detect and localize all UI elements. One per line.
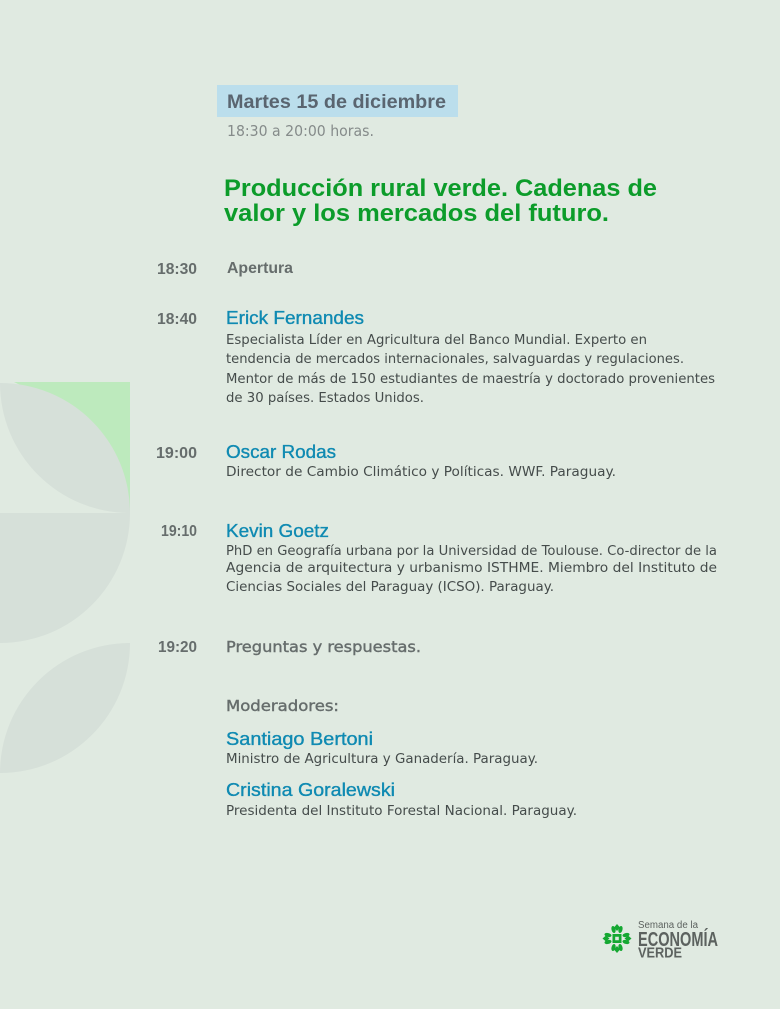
item: Kevin Goetz <box>161 521 717 595</box>
item: Erick Fernandes: 18:40 <box>157 311 197 328</box>
item: opening: 18:30 <box>157 261 197 278</box>
item: Oscar Rodas: 19:00 <box>156 445 197 462</box>
logo <box>602 920 718 962</box>
logo wordmark: VERDE <box>638 944 682 962</box>
session title: Producción rural verde. Cadenas de <box>224 175 657 202</box>
moderator: Cristina Goralewski: Cristina Goralewski <box>226 780 395 800</box>
item: Kevin Goetz: 19:10 <box>161 523 197 540</box>
item: Kevin Goetz: PhD en Geografía urbana por la Universidad de Toulouse. Co-director de la <box>226 543 717 559</box>
top leaf <box>0 383 130 513</box>
item: Erick Fernandes: de 30 países. Estados Unidos. <box>226 390 424 406</box>
moderator: Cristina Goralewski: Presidenta del Instituto Forestal Nacional. Paraguay. <box>226 804 577 819</box>
item: questions: 19:20 <box>158 639 197 656</box>
session title <box>224 175 657 227</box>
item: questions <box>158 638 421 656</box>
logo wordmark: ECONOMÍA <box>638 928 718 951</box>
schedule hours: 18:30 a 20:00 horas. <box>227 122 374 140</box>
item: Erick Fernandes: Especialista Líder en Agricultura del Banco Mundial. Experto en <box>226 332 647 348</box>
decorative leaves <box>0 382 130 773</box>
moderator: Santiago Bertoni: Ministro de Agricultura y Ganadería. Paraguay. <box>226 751 538 767</box>
item: Oscar Rodas: Director de Cambio Climático y Políticas. WWF. Paraguay. <box>226 464 616 480</box>
logo wordmark: Semana de la <box>638 920 698 931</box>
moderator: Cristina Goralewski <box>226 780 577 819</box>
item: Erick Fernandes: Erick Fernandes <box>226 308 364 328</box>
item: Erick Fernandes <box>157 308 715 406</box>
green corner <box>14 382 130 513</box>
moderator: Santiago Bertoni <box>226 729 538 767</box>
item: Oscar Rodas: Oscar Rodas <box>226 442 336 462</box>
item: Kevin Goetz: Kevin Goetz <box>226 521 329 541</box>
item: questions: Preguntas y respuestas. <box>226 638 421 656</box>
item: Kevin Goetz: Ciencias Sociales del Paraguay (ICSO). Paraguay. <box>226 580 554 595</box>
quarter circle <box>0 513 130 643</box>
item: opening <box>157 260 293 278</box>
logo wordmark <box>638 920 718 962</box>
date heading: Martes 15 de diciembre <box>227 91 446 113</box>
session title: valor y los mercados del futuro. <box>224 200 609 227</box>
bottom leaf <box>0 643 130 773</box>
item: Oscar Rodas <box>156 442 616 480</box>
item: Erick Fernandes: tendencia de mercados internacionales, salvaguardas y regulaciones. <box>226 352 684 367</box>
item: Erick Fernandes: Mentor de más de 150 estudiantes de maestría y doctorado provenientes <box>226 371 715 387</box>
moderator: Santiago Bertoni: Santiago Bertoni <box>226 729 373 749</box>
moderators heading: Moderadores: <box>226 697 339 715</box>
date heading <box>217 85 458 117</box>
item: Kevin Goetz: Agencia de arquitectura y urbanismo ISTHME. Miembro del Instituto de <box>226 561 717 576</box>
item: opening: Apertura <box>227 260 293 277</box>
icon: green flower <box>602 924 632 953</box>
